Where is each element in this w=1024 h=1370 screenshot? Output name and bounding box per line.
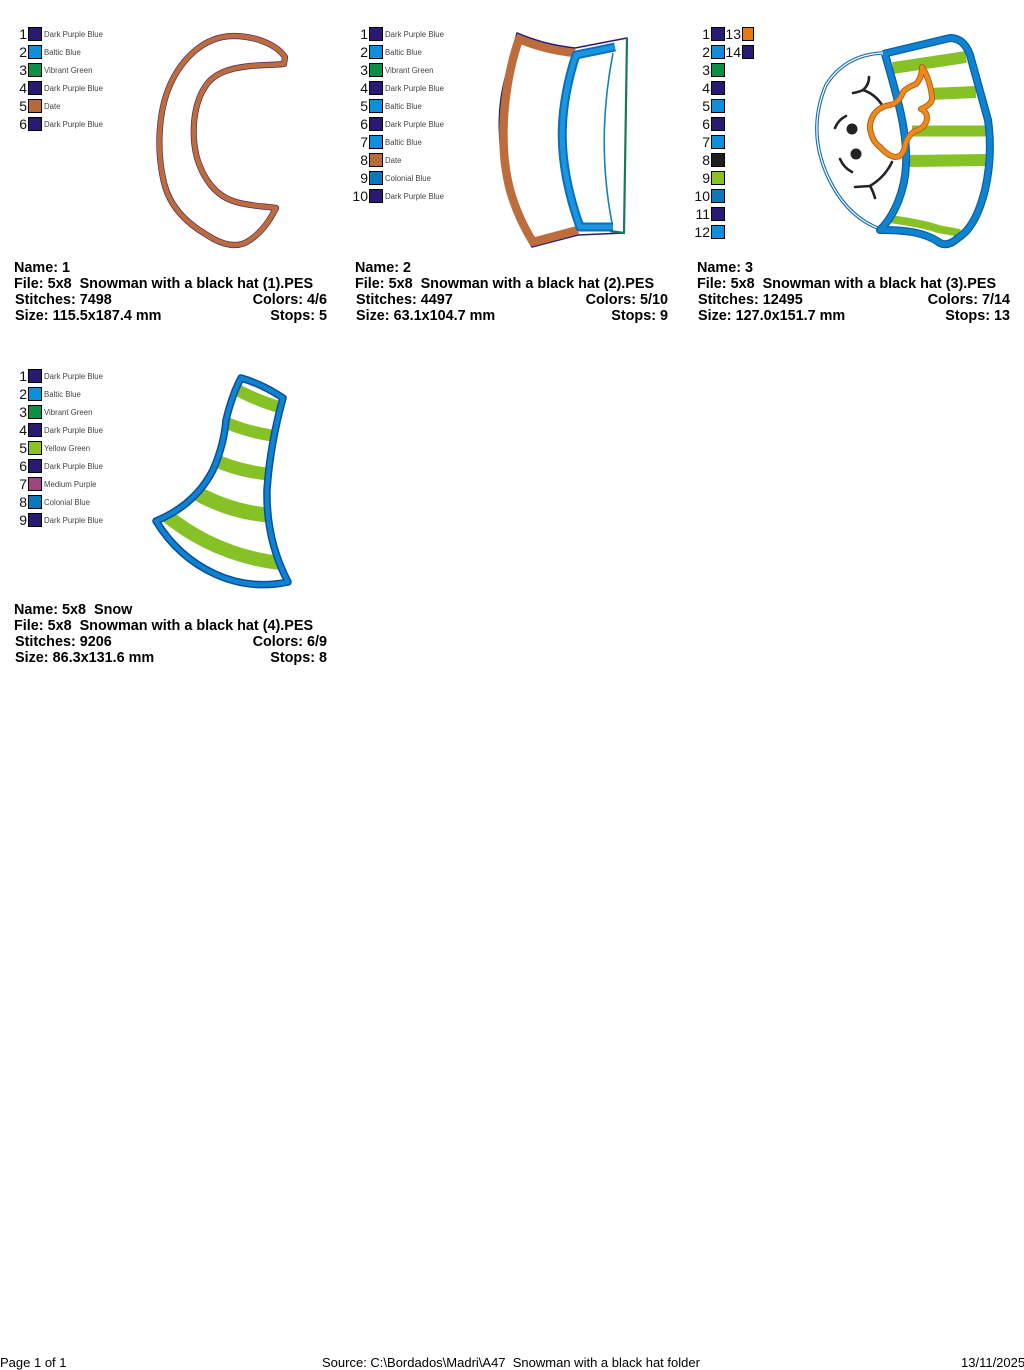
- legend: design 2 thread colours: 4: [360, 80, 368, 96]
- legend: design 1 thread colours: Dark Purple Blue: [44, 30, 103, 39]
- legend: design 2 thread colours: 9: [360, 170, 368, 186]
- info block: design 2: Stitches: 4497: [356, 292, 453, 308]
- legend: design 2 thread colours: 3: [360, 62, 368, 78]
- legend: design 3 thread colours: 7: [702, 134, 710, 150]
- legend: design 3 thread colours: 5: [702, 98, 710, 114]
- legend: design 4 thread colours: 7: [19, 476, 27, 492]
- legend: design 4 thread colours: 5: [19, 440, 27, 456]
- legend: design 4 thread colours: [19, 368, 103, 528]
- info block: design 4: Colors: 6/9: [253, 634, 327, 650]
- info block: design 3: Name: 3: [697, 260, 753, 276]
- legend: design 1 thread colours: 5: [19, 98, 27, 114]
- legend: design 3 thread colours: 8: [702, 152, 710, 168]
- info block: design 1: Name: 1: [14, 260, 70, 276]
- legend: design 2 thread colours: Dark Purple Blue: [385, 30, 444, 39]
- info block: design 3: [697, 260, 1010, 324]
- design 4: striped hat: [156, 378, 290, 585]
- legend: design 4 thread colours: Yellow Green: [44, 444, 90, 453]
- legend: design 2 thread colours: Date: [385, 156, 401, 165]
- legend: design 2 thread colours: 6: [360, 116, 368, 132]
- legend: design 2 thread colours: 7: [360, 134, 368, 150]
- legend: design 1 thread colours: Baltic Blue: [44, 48, 81, 57]
- legend: design 1 thread colours: Dark Purple Blue: [44, 120, 103, 129]
- legend: design 4 thread colours: Medium Purple: [44, 480, 96, 489]
- legend: design 4 thread colours: 1: [19, 368, 27, 384]
- legend: design 4 thread colours: Colonial Blue: [44, 498, 90, 507]
- legend: design 4 thread colours: 8: [19, 494, 27, 510]
- legend: design 2 thread colours: Baltic Blue: [385, 102, 422, 111]
- legend: design 2 thread colours: Colonial Blue: [385, 174, 431, 183]
- legend: design 4 thread colours: Dark Purple Blue: [44, 372, 103, 381]
- info block: design 2: File: 5x8 Snowman with a black hat (2).PES: [355, 276, 654, 292]
- legend: design 1 thread colours: 1: [19, 26, 27, 42]
- eyebrows and arms: [835, 77, 892, 198]
- legend: design 2 thread colours: 1: [360, 26, 368, 42]
- legend: design 3 thread colours: 1: [702, 26, 710, 42]
- legend: design 4 thread colours: Baltic Blue: [44, 390, 81, 399]
- legend: design 2 thread colours: Baltic Blue: [385, 48, 422, 57]
- info block: design 1: File: 5x8 Snowman with a black hat (1).PES: [14, 276, 313, 292]
- design 3: snowman head with hat: [817, 38, 990, 244]
- info block: design 2: Size: 63.1x104.7 mm: [356, 308, 495, 324]
- footer: date: 13/11/2025: [961, 1355, 1024, 1370]
- legend: design 4 thread colours: 2: [19, 386, 27, 402]
- info block: design 2: [355, 260, 668, 324]
- info block: design 3: Size: 127.0x151.7 mm: [698, 308, 845, 324]
- footer: source path: Source: C:\Bordados\Madri\A47 Snowman with a black hat folder: [322, 1355, 700, 1370]
- legend: design 2 thread colours: Baltic Blue: [385, 138, 422, 147]
- info block: design 1: [14, 260, 327, 324]
- embroidery designs artwork: [152, 32, 994, 588]
- face outline: [817, 53, 882, 229]
- info block: design 3: Stops: 13: [945, 308, 1010, 324]
- info block: design 4: Name: 5x8 Snow: [14, 602, 132, 618]
- green hat stripes: [890, 57, 987, 233]
- design 1: brown crescent outline: [159, 36, 285, 245]
- info block: design 2: Stops: 9: [611, 308, 668, 324]
- info block: design 3: File: 5x8 Snowman with a black hat (3).PES: [697, 276, 996, 292]
- info block: design 3: Stitches: 12495: [698, 292, 803, 308]
- eyes: [846, 124, 858, 134]
- legend: design 3 thread colours: [694, 26, 754, 240]
- legend: design 3 thread colours: 6: [702, 116, 710, 132]
- legend: design 2 thread colours: 10: [352, 188, 368, 204]
- info block: design 4: Stops: 8: [270, 650, 327, 666]
- info block: design 4: Stitches: 9206: [15, 634, 112, 650]
- info block: design 2: Colors: 5/10: [586, 292, 668, 308]
- legend: design 3 thread colours: 11: [695, 206, 710, 222]
- legend: design 3 thread colours: 2: [702, 44, 710, 60]
- legend: design 1 thread colours: 6: [19, 116, 27, 132]
- legend: design 2 thread colours: Dark Purple Blue: [385, 120, 444, 129]
- info block: design 1: Colors: 4/6: [253, 292, 327, 308]
- legend: design 1 thread colours: Vibrant Green: [44, 66, 92, 75]
- legend: design 1 thread colours: 4: [19, 80, 27, 96]
- legend: design 2 thread colours: Dark Purple Blue: [385, 192, 444, 201]
- legend: design 2 thread colours: 2: [360, 44, 368, 60]
- legend: design 3 thread colours: 3: [702, 62, 710, 78]
- legend: design 2 thread colours: 8: [360, 152, 368, 168]
- legend: design 4 thread colours: 3: [19, 404, 27, 420]
- legend: design 2 thread colours: Vibrant Green: [385, 66, 433, 75]
- legend: design 2 thread colours: [352, 26, 444, 204]
- legend: design 4 thread colours: Dark Purple Blue: [44, 516, 103, 525]
- info block: design 1: Stitches: 7498: [15, 292, 112, 308]
- legend: design 4 thread colours: Dark Purple Blue: [44, 426, 103, 435]
- legend: design 1 thread colours: Date: [44, 102, 60, 111]
- legend: design 2 thread colours: Dark Purple Blue: [385, 84, 444, 93]
- info block: design 2: Name: 2: [355, 260, 411, 276]
- legend: design 4 thread colours: 6: [19, 458, 27, 474]
- info block: design 1: Stops: 5: [270, 308, 327, 324]
- info block: design 4: File: 5x8 Snowman with a black hat (4).PES: [14, 618, 313, 634]
- legend: design 1 thread colours: 2: [19, 44, 27, 60]
- legend: design 4 thread colours: Vibrant Green: [44, 408, 92, 417]
- legend: design 3 thread colours: 10: [694, 188, 710, 204]
- legend: design 3 thread colours: 4: [702, 80, 710, 96]
- info block: design 4: [14, 602, 327, 666]
- legend: design 1 thread colours: Dark Purple Blue: [44, 84, 103, 93]
- footer: page number: Page 1 of 1: [0, 1355, 66, 1370]
- legend: design 1 thread colours: 3: [19, 62, 27, 78]
- info block: design 3: Colors: 7/14: [928, 292, 1010, 308]
- legend: design 3 thread colours: 12: [694, 224, 710, 240]
- legend: design 3 thread colours: 13: [725, 26, 741, 42]
- orange scalloped nose outline: [870, 67, 932, 157]
- legend: design 2 thread colours: 5: [360, 98, 368, 114]
- legend: design 4 thread colours: Dark Purple Blue: [44, 462, 103, 471]
- legend: design 3 thread colours: 9: [702, 170, 710, 186]
- design 2: brown and blue hat band: [499, 33, 627, 247]
- legend: design 4 thread colours: 9: [19, 512, 27, 528]
- legend: design 4 thread colours: 4: [19, 422, 27, 438]
- info block: design 1: Size: 115.5x187.4 mm: [15, 308, 161, 324]
- info block: design 4: Size: 86.3x131.6 mm: [15, 650, 154, 666]
- legend: design 1 thread colours: [19, 26, 103, 132]
- legend: design 3 thread colours: 14: [725, 44, 741, 60]
- hat blue outline: [880, 38, 990, 244]
